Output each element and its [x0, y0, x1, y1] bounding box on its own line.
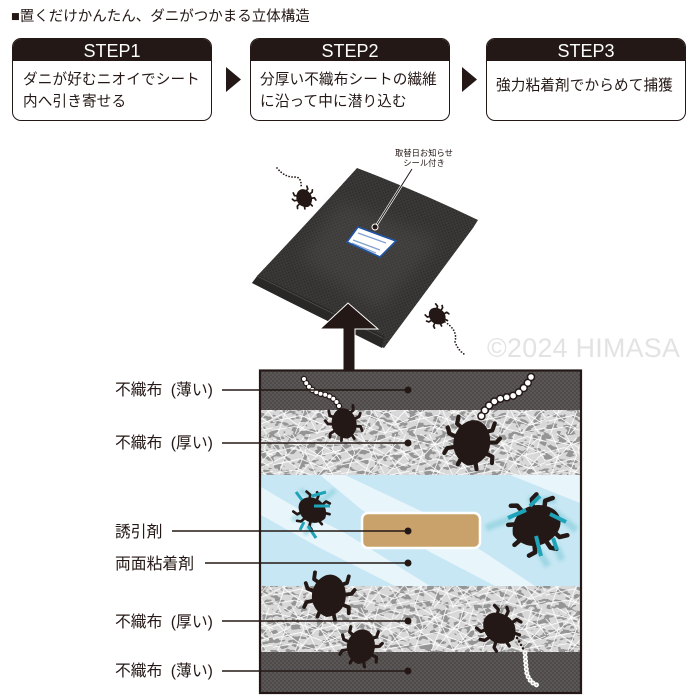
panel: step 2: に沿って中に潜り込む: [260, 94, 407, 110]
panel: step 3: [486, 38, 686, 121]
label: attractant: [115, 523, 412, 541]
icon: mite near package, upper left: [277, 168, 318, 212]
labels and leaders: [115, 381, 412, 680]
icon: stuck large mite right: [486, 489, 576, 566]
frame: [260, 370, 581, 693]
label: thick non-woven top: 不織布 (厚い): [115, 434, 213, 452]
title: ■置くだけかんたん、ダニがつかまる立体構造: [11, 9, 310, 25]
label: thin non-woven bottom: 不織布 (薄い): [115, 662, 213, 680]
watermark: ©2024 HIMASA: [487, 333, 680, 363]
callout: sticker caption: [372, 148, 453, 230]
label: thick non-woven bottom: [115, 613, 412, 631]
icon: stuck mite left: [290, 487, 336, 538]
panel: layer cross-section: [260, 370, 581, 693]
label: thick non-woven bottom: 不織布 (厚い): [115, 613, 213, 631]
arrow: step 1 to step 2: [226, 67, 241, 92]
callout: sticker caption: シール付き: [403, 158, 445, 168]
layer: thin non-woven top: [260, 371, 581, 411]
icon: large mite with bead trail, top right: [441, 377, 531, 473]
sticker: [347, 227, 396, 257]
icon: mite lower layer centre: [337, 625, 384, 669]
label: thin non-woven top: 不織布 (薄い): [115, 381, 213, 399]
layer: thick non-woven top: [261, 410, 580, 476]
panel: step 2: 分厚い不織布シートの繊維: [260, 72, 437, 88]
arrow: up to package: [320, 303, 378, 371]
label: double-sided adhesive: [115, 555, 412, 573]
layer: thin non-woven bottom: [260, 652, 581, 693]
panel: step 1: STEP1: [83, 41, 141, 61]
arrow: step 2 to step 3: [462, 67, 477, 92]
panel: step 1: [12, 38, 212, 121]
label: thin non-woven bottom: [115, 662, 412, 680]
panel: step 3: STEP3: [557, 41, 615, 61]
layer: double-sided adhesive: [261, 475, 580, 587]
icon: mite lower layer left: [301, 571, 356, 622]
label: thin non-woven top: [115, 381, 412, 399]
label: attractant: 誘引剤: [115, 523, 162, 541]
layer: thick non-woven bottom: [261, 586, 580, 653]
callout: sticker caption: 取替日お知らせ: [395, 148, 453, 158]
panel: step 1: 内へ引き寄せる: [23, 94, 126, 110]
panel: step 3: 強力粘着剤でからめて捕獲: [496, 78, 673, 94]
panel: step 2: [250, 38, 450, 121]
product: sheet package: [252, 168, 478, 348]
icon: mite with bead trail, top left: [304, 379, 365, 444]
panel: step 2: STEP2: [321, 41, 379, 61]
icon: mite near package, lower right: [422, 301, 464, 354]
attractant pad: [362, 513, 480, 548]
label: double-sided adhesive: 両面粘着剤: [115, 555, 194, 573]
icon: mite with trail, lower right: [472, 600, 537, 685]
panel: step 1: ダニが好むニオイでシート: [23, 72, 200, 88]
label: thick non-woven top: [115, 434, 412, 452]
